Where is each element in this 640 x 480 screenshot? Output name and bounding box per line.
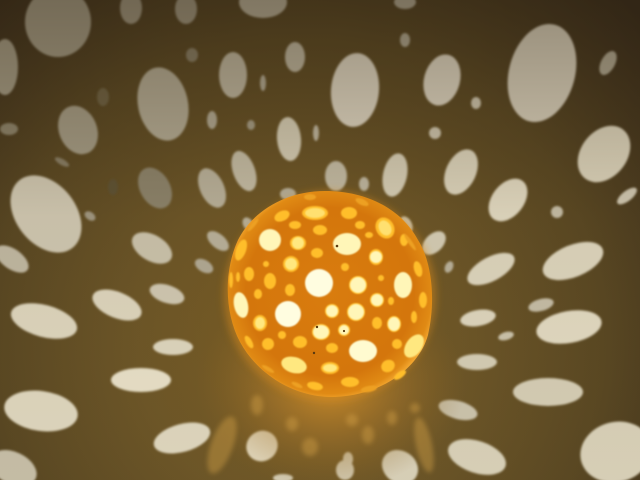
- orb body: [228, 191, 432, 397]
- orb holes bright centres: [231, 208, 428, 376]
- orb halo: [224, 191, 436, 401]
- reflected glow under orb: [195, 280, 465, 480]
- glowing orb: [228, 191, 432, 397]
- orb holes outer yellow: [229, 194, 427, 393]
- orb specks: [313, 245, 345, 354]
